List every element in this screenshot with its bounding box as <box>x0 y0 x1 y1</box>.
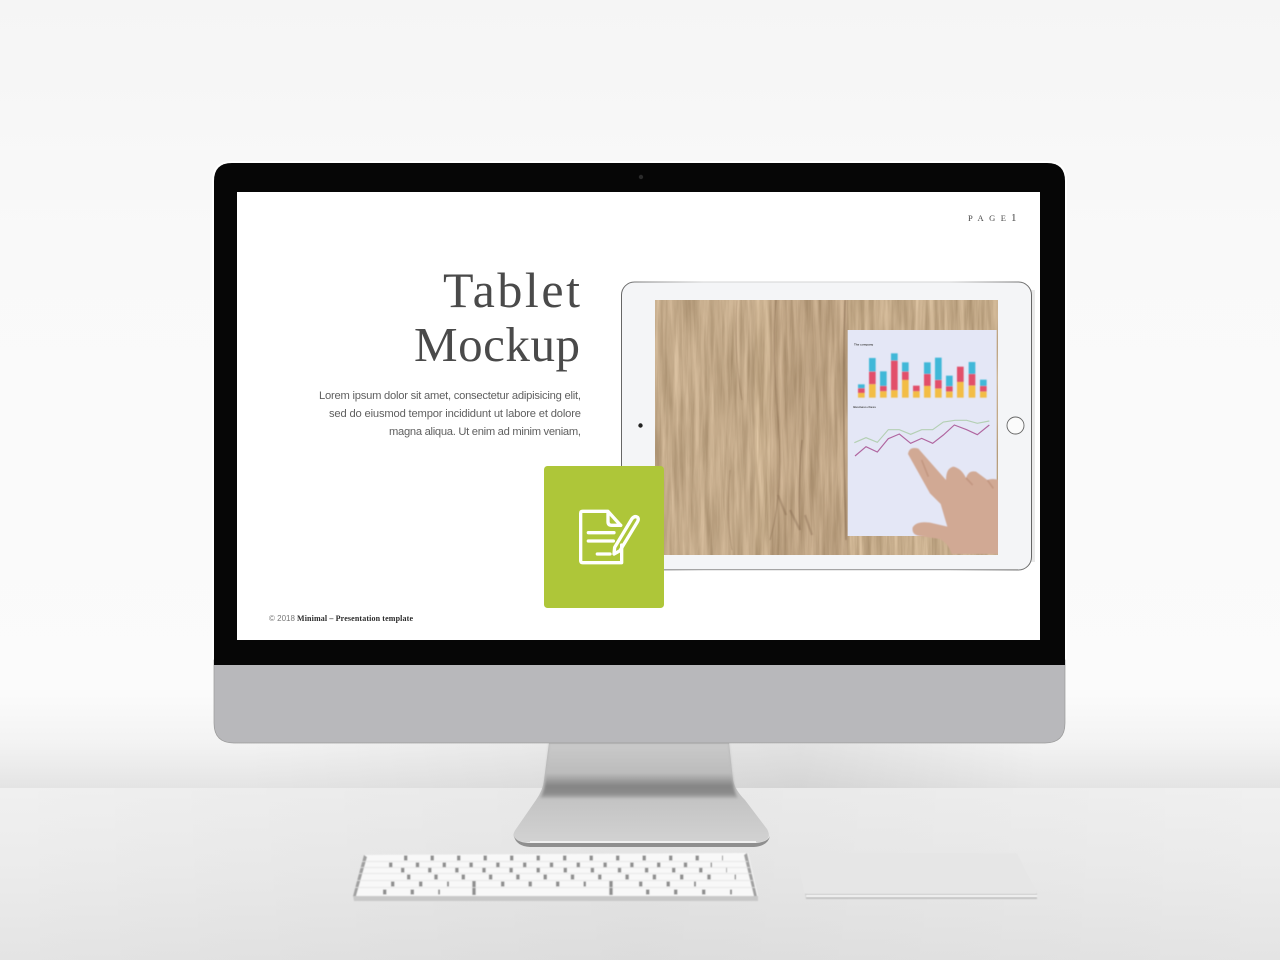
wood tone variation <box>655 300 755 555</box>
paper with charts <box>848 330 999 554</box>
keyboard body <box>353 853 758 901</box>
key row separators <box>355 862 755 888</box>
page number <box>968 212 1016 224</box>
key gaps <box>383 858 736 895</box>
page number: 1 <box>1011 212 1016 224</box>
green icon card <box>544 466 664 608</box>
tablet mockup <box>622 282 1035 570</box>
body text <box>319 390 581 438</box>
bar chart <box>858 353 987 398</box>
monitor shadow on wall <box>240 744 1040 790</box>
title: Mockup <box>414 317 580 372</box>
chart headings: Business chess <box>853 405 876 409</box>
desk surface <box>0 788 1280 960</box>
monitor bezel <box>214 163 1065 665</box>
body text: Lorem ipsum dolor sit amet, consectetur adipisicing elit, <box>319 390 581 402</box>
footer credit: © 2018 <box>269 614 295 623</box>
paper sheet <box>848 330 997 536</box>
chart headings <box>853 343 876 409</box>
monitor chin <box>214 660 1065 743</box>
keyboard edges <box>353 853 757 896</box>
tablet shadow <box>1031 290 1035 562</box>
wood texture <box>655 300 998 555</box>
footer credit: Minimal – Presentation template <box>297 614 413 623</box>
tablet home button <box>1007 417 1024 434</box>
trackpad <box>797 853 1037 899</box>
monitor outline glow <box>212 161 1067 660</box>
pointing hand <box>908 448 999 554</box>
title: Tablet <box>443 262 580 318</box>
slide screen <box>237 192 1040 640</box>
webcam <box>639 175 643 179</box>
keyboard <box>353 853 758 901</box>
monitor stand <box>513 743 770 847</box>
chart headings: The company <box>854 343 874 347</box>
tablet camera <box>638 423 643 428</box>
page number: PAGE <box>968 213 1006 223</box>
body text: magna aliqua. Ut enim ad minim veniam, <box>389 426 581 438</box>
body text: sed do eiusmod tempor incididunt ut labore et dolore <box>329 408 581 420</box>
icon: document with pencil <box>581 511 638 563</box>
title <box>414 262 580 372</box>
line chart <box>854 420 989 456</box>
tablet body <box>622 282 1032 570</box>
tablet photo <box>655 300 999 555</box>
wood grain lines <box>728 300 846 550</box>
monitor <box>212 161 1067 743</box>
